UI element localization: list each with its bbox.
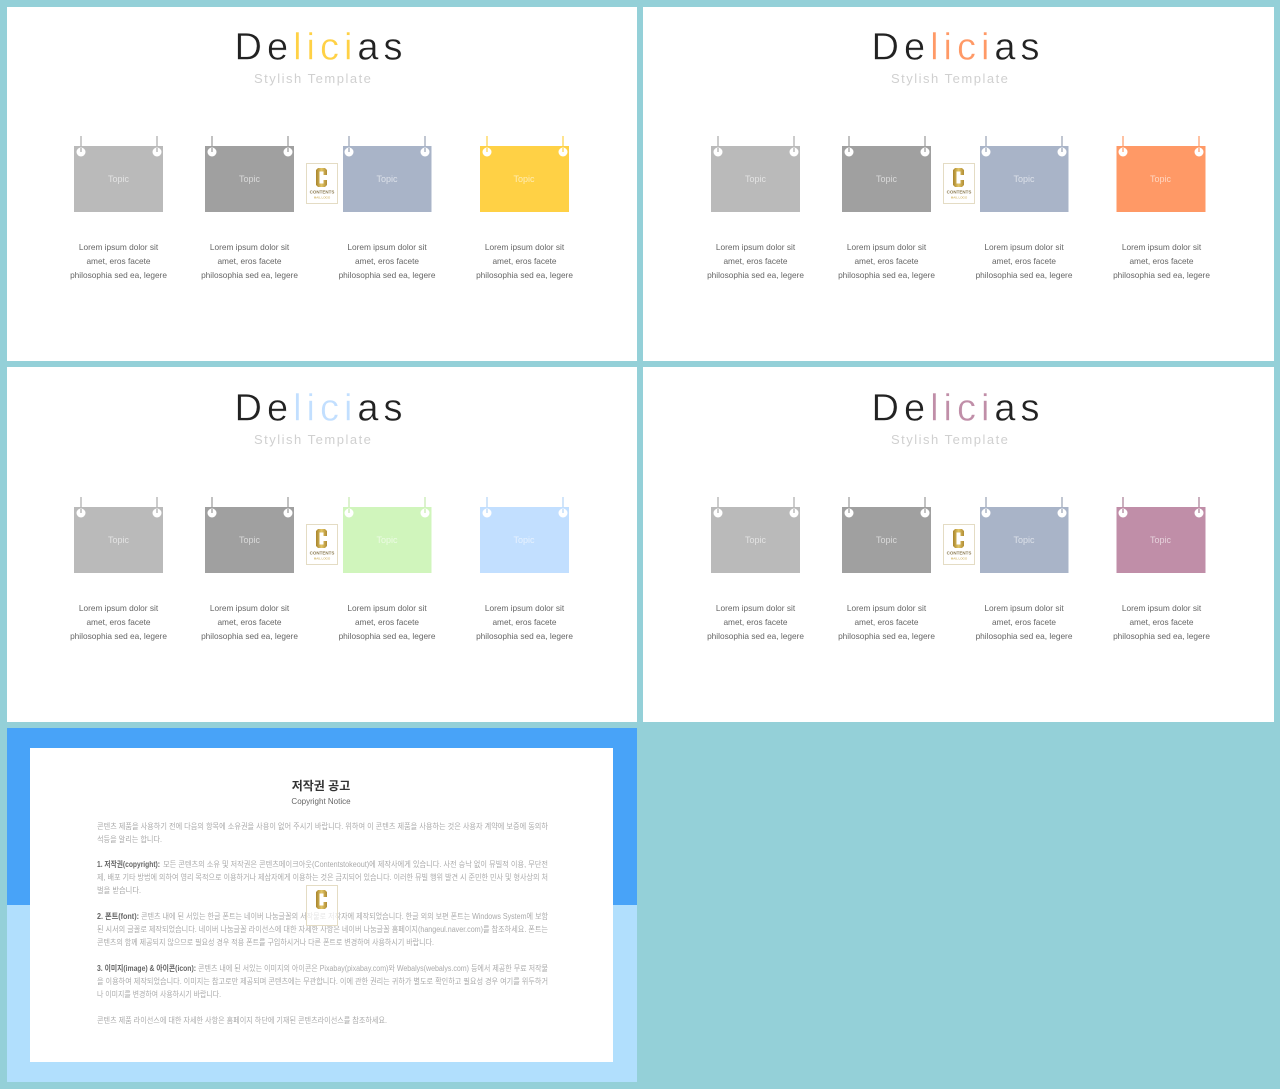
subtitle: Stylish Template [891, 71, 1009, 86]
title: Delicias [872, 26, 1045, 68]
logo [944, 164, 974, 204]
card 1 [711, 497, 800, 573]
card 3: Topic [1013, 535, 1035, 545]
section 1: 모든 콘텐츠의 소유 및 저작권은 콘텐츠메이크아웃(Contentstokeout)에 제작사에게 있습니다. 사전 승낙 없이 뮤빌적 이용, 무단전 [163, 859, 548, 869]
logo: CONTENTS [947, 550, 971, 556]
card 1 [74, 497, 163, 573]
card 4: Topic [513, 535, 535, 545]
card 4 text: amet, eros facete [492, 256, 557, 266]
card 1 text: philosophia sed ea, legere [707, 270, 804, 280]
card 1 text: amet, eros facete [86, 617, 151, 627]
card 2 text: amet, eros facete [217, 617, 282, 627]
logo [306, 164, 338, 204]
card 1 text: philosophia sed ea, legere [707, 631, 804, 641]
logo: CONTENTS [310, 550, 334, 556]
section 1: 제, 배포 기타 방법에 의하여 영리 목적으로 이용하거나 제삼자에게 이용하는 것은 금지되어 있습니다. 이러한 뮤빌 행위 발견 시 준민한 민사 및 형사상의 처 [97, 872, 548, 882]
card 1: Topic [108, 535, 130, 545]
slide 2: orange [643, 7, 1274, 361]
title: Delicias [234, 388, 408, 430]
card 1: Topic [745, 174, 767, 184]
logo: CONTENTS [947, 190, 971, 194]
card 1: Topic [108, 174, 130, 184]
card 4 text: amet, eros facete [1129, 256, 1194, 266]
card 2 text: Lorem ipsum dolor sit [847, 242, 927, 252]
card 4: Topic [1150, 535, 1172, 545]
card 2 text: amet, eros facete [854, 617, 919, 627]
card 3 text: amet, eros facete [992, 617, 1056, 627]
card 4 text: Lorem ipsum dolor sit [1122, 603, 1202, 613]
section 3: 을 이용하여 제작되었습니다. 이미지는 참고로만 제공되며 콘텐츠에는 무관합니다. 이에 관한 권리는 귀하가 별도로 확인하고 필요성 경우 여기를 위두하거 [97, 976, 548, 986]
card 2 text: philosophia sed ea, legere [201, 631, 298, 641]
card 1 text: Lorem ipsum dolor sit [79, 242, 159, 252]
notice subheading: Copyright Notice [291, 797, 351, 806]
card 1 [74, 136, 163, 212]
section 3: 나 이미지를 변경하여 사용하시기 바랍니다. [97, 989, 221, 999]
logo: MAIL LOGO [951, 196, 968, 200]
card 4 text: philosophia sed ea, legere [476, 270, 573, 280]
card 3 [980, 497, 1068, 573]
card 4 text: philosophia sed ea, legere [476, 631, 573, 641]
card 4 text: philosophia sed ea, legere [1113, 270, 1210, 280]
card 4 text: Lorem ipsum dolor sit [485, 242, 565, 252]
section 2: 콘텐츠의 함께 제공되지 않으므로 필요성 경우 적용 폰트를 구입하시거나 다른 폰트로 변경하여 사용하시기 바랍니다. [97, 937, 434, 947]
card 4 text: amet, eros facete [492, 617, 557, 627]
logo: MAIL LOGO [314, 196, 331, 200]
section 3: 콘텐츠 내에 된 서있는 이미지의 아이콘은 Pixabay(pixabay.com)와 Webalys(webalys.com) 등에서 제공한 무료 저작물 [198, 963, 548, 973]
logo: MAIL LOGO [314, 556, 331, 560]
card 3 text: philosophia sed ea, legere [339, 270, 436, 280]
card 1 text: Lorem ipsum dolor sit [716, 603, 796, 613]
panel: copyright notice [7, 728, 637, 1082]
logo [944, 524, 974, 564]
card 1 text: Lorem ipsum dolor sit [79, 603, 159, 613]
subtitle: Stylish Template [254, 432, 372, 447]
section 2: 2. 폰트(font): [97, 912, 139, 921]
subtitle: Stylish Template [254, 71, 372, 86]
card 4 [1116, 497, 1206, 573]
card 3 text: Lorem ipsum dolor sit [984, 603, 1064, 613]
card 2: Topic [239, 174, 261, 184]
slide 4: mauve [643, 367, 1274, 722]
card 2 text: amet, eros facete [854, 256, 919, 266]
card 1 text: amet, eros facete [723, 256, 788, 266]
card 1 text: Lorem ipsum dolor sit [716, 242, 796, 252]
card 4 text: Lorem ipsum dolor sit [485, 603, 565, 613]
card 3 [343, 497, 432, 573]
card 4 [1116, 136, 1206, 212]
card 3 text: philosophia sed ea, legere [976, 631, 1073, 641]
card 2 text: philosophia sed ea, legere [201, 270, 298, 280]
card 3 text: philosophia sed ea, legere [976, 270, 1073, 280]
card 3 text: amet, eros facete [355, 617, 419, 627]
logo [306, 524, 338, 564]
card 3: Topic [376, 535, 398, 545]
card 2 [205, 497, 294, 573]
card 4 text: Lorem ipsum dolor sit [1122, 242, 1202, 252]
card 2 [842, 136, 931, 212]
card 1 text: philosophia sed ea, legere [70, 631, 167, 641]
card 3 text: amet, eros facete [992, 256, 1056, 266]
card 3 text: Lorem ipsum dolor sit [984, 242, 1064, 252]
section 2: 된 시서의 글꼴로 제작되었습니다. 네이버 나눔글꼴 라이선스에 대한 자세한 사항은 네이버 나눔글꼴 홈페이지(hangeul.naver.com)를 참조하세요. 폰트는 [97, 924, 548, 934]
logo [306, 886, 338, 926]
card 1: Topic [745, 535, 767, 545]
card 2: Topic [876, 535, 898, 545]
card 3 [343, 136, 432, 212]
card 2 [842, 497, 931, 573]
slide 1: yellow [7, 7, 637, 361]
card 2 text: Lorem ipsum dolor sit [847, 603, 927, 613]
card 3 [980, 136, 1068, 212]
card 1 text: amet, eros facete [723, 617, 788, 627]
card 3: Topic [1013, 174, 1035, 184]
intro paragraph: 콘텐츠 제품을 사용하기 전에 다음의 항목에 소유권을 사용이 없어 주시기 바랍니다. 위하여 이 콘텐츠 제품을 사용하는 것은 사용자 계약에 보증에 동의하 [97, 821, 549, 831]
card 4 [480, 497, 569, 573]
card 2 text: Lorem ipsum dolor sit [210, 603, 290, 613]
card 4 [480, 136, 569, 212]
section 1: 1. 저작권(copyright): [97, 859, 160, 869]
card 2 text: Lorem ipsum dolor sit [210, 242, 290, 252]
section 1: 벌을 받습니다. [97, 885, 141, 895]
section 2: 콘텐츠 내에 된 서있는 한글 폰트는 네이버 나눔글꼴의 서작물로 저작자에 제작되었습니다. 한글 외의 보편 폰트는 Windows System에 보함 [141, 911, 549, 921]
card 3 text: Lorem ipsum dolor sit [347, 242, 427, 252]
slide 3: green and blue [7, 367, 637, 722]
card 2 text: philosophia sed ea, legere [838, 631, 935, 641]
card 4: Topic [513, 174, 535, 184]
card 1 text: amet, eros facete [86, 256, 151, 266]
logo: CONTENTS [310, 190, 334, 194]
card 4 text: philosophia sed ea, legere [1113, 631, 1210, 641]
card 3 text: philosophia sed ea, legere [339, 631, 436, 641]
card 1 text: philosophia sed ea, legere [70, 270, 167, 280]
subtitle: Stylish Template [891, 432, 1009, 447]
card 1 [711, 136, 800, 212]
closing line: 콘텐츠 제품 라이선스에 대한 자세한 사항은 홈페이지 하단에 기재된 콘텐츠라이선스를 참조하세요. [97, 1015, 387, 1025]
card 2 text: amet, eros facete [217, 256, 282, 266]
section 3: 3. 이미지(image) & 아이콘(icon): [97, 963, 196, 973]
card 2: Topic [876, 174, 898, 184]
notice heading: 저작권 공고 [292, 778, 350, 793]
card 4: Topic [1150, 174, 1172, 184]
card 4 text: amet, eros facete [1129, 617, 1194, 627]
card 3: Topic [376, 174, 398, 184]
card 2 [205, 136, 294, 212]
card 3 text: Lorem ipsum dolor sit [347, 603, 427, 613]
intro paragraph: 석등을 알리는 합니다. [97, 834, 162, 844]
title: Delicias [872, 388, 1045, 430]
title: Delicias [234, 26, 408, 68]
card 2: Topic [239, 535, 261, 545]
logo: MAIL LOGO [951, 556, 968, 560]
card 3 text: amet, eros facete [355, 256, 419, 266]
card 2 text: philosophia sed ea, legere [838, 270, 935, 280]
